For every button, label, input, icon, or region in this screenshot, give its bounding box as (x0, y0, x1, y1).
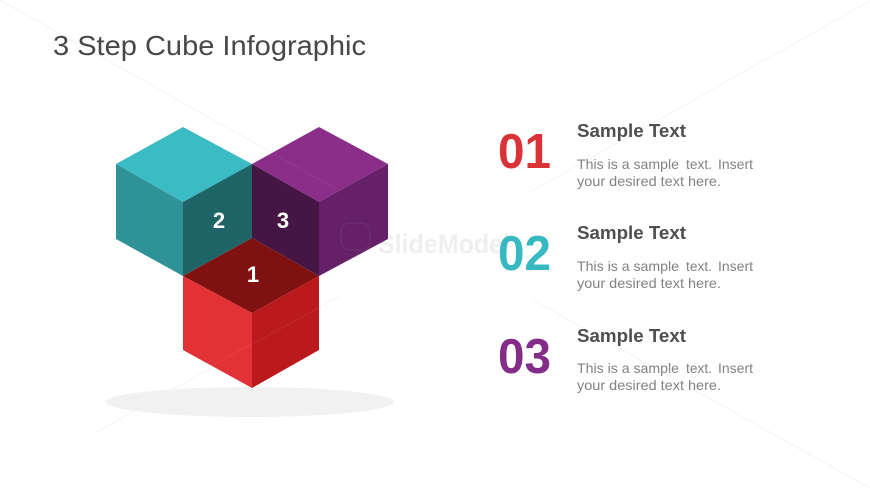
body 03: Insert (718, 360, 753, 376)
cube 2: teal (116, 127, 252, 276)
body 01: Insert (718, 156, 753, 172)
item 03 (498, 326, 753, 393)
cube number 2: 2 (213, 208, 225, 233)
body 02: text. (686, 258, 712, 274)
heading 03: Sample Text (577, 326, 686, 346)
cube 1: red (183, 238, 319, 388)
body 02: This is a sample (577, 258, 679, 274)
body 03: This is a sample (577, 360, 679, 376)
shadow ellipse (106, 387, 394, 417)
body 03: your desired text here. (577, 377, 721, 393)
number 02: 02 (498, 227, 551, 281)
title: 3 Step Cube Infographic (53, 30, 366, 61)
number 03: 03 (498, 330, 551, 384)
body 01: This is a sample (577, 156, 679, 172)
body 02: Insert (718, 258, 753, 274)
body 02: your desired text here. (577, 275, 721, 291)
number 01: 01 (498, 125, 551, 179)
cube infographic (116, 127, 388, 388)
watermark: SlideModel (378, 229, 510, 259)
cube number 1: 1 (247, 262, 259, 287)
body 03: text. (686, 360, 712, 376)
item 02 (498, 223, 753, 291)
heading 01: Sample Text (577, 121, 686, 141)
cube 3: purple (252, 127, 388, 276)
watermark (341, 223, 510, 259)
item 01 (498, 121, 753, 189)
body 01: text. (686, 156, 712, 172)
body 01: your desired text here. (577, 173, 721, 189)
heading 02: Sample Text (577, 223, 686, 243)
cube number 3: 3 (277, 208, 289, 233)
